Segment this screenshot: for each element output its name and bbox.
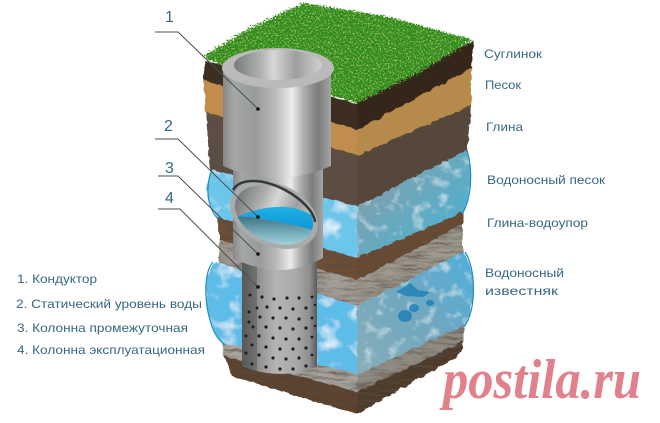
callout numbers (164, 9, 174, 207)
callout numbers: 3 (165, 160, 174, 177)
soil layer labels: Суглинок (484, 47, 543, 61)
right face layers (357, 40, 473, 414)
grass top (202, 3, 473, 103)
column 1: conductor (222, 48, 334, 178)
column 4: production column (242, 262, 317, 374)
soil layer labels (484, 47, 606, 298)
left face layers (204, 60, 357, 414)
legend (16, 272, 205, 357)
soil layer labels: известняк (485, 284, 559, 298)
column 3: intermediate column (230, 169, 323, 270)
water outlines (206, 150, 474, 345)
soil layer labels: Глина-водоупор (487, 216, 588, 230)
watermark: postila.ru (439, 349, 641, 411)
cutaway opening with water (230, 180, 318, 249)
limestone water detail (396, 283, 434, 322)
legend: 4. Колонна эксплуатационная (17, 343, 205, 357)
soil layer labels: Песок (485, 78, 522, 92)
soil layer labels: Глина (486, 120, 523, 134)
soil layer labels: Водоносный (485, 266, 564, 280)
legend: 2. Статический уровень воды (16, 297, 202, 311)
soil layer labels: Водоносный песок (487, 173, 606, 187)
legend: 1. Кондуктор (17, 272, 97, 286)
well casing (219, 48, 334, 374)
perforation holes (244, 294, 316, 371)
callout numbers: 1 (165, 9, 174, 26)
callout numbers: 2 (164, 118, 173, 135)
callout numbers: 4 (165, 190, 174, 207)
soil block (202, 3, 474, 414)
leader lines and numbers (155, 32, 258, 287)
legend: 3. Колонна промежуточная (17, 321, 188, 335)
